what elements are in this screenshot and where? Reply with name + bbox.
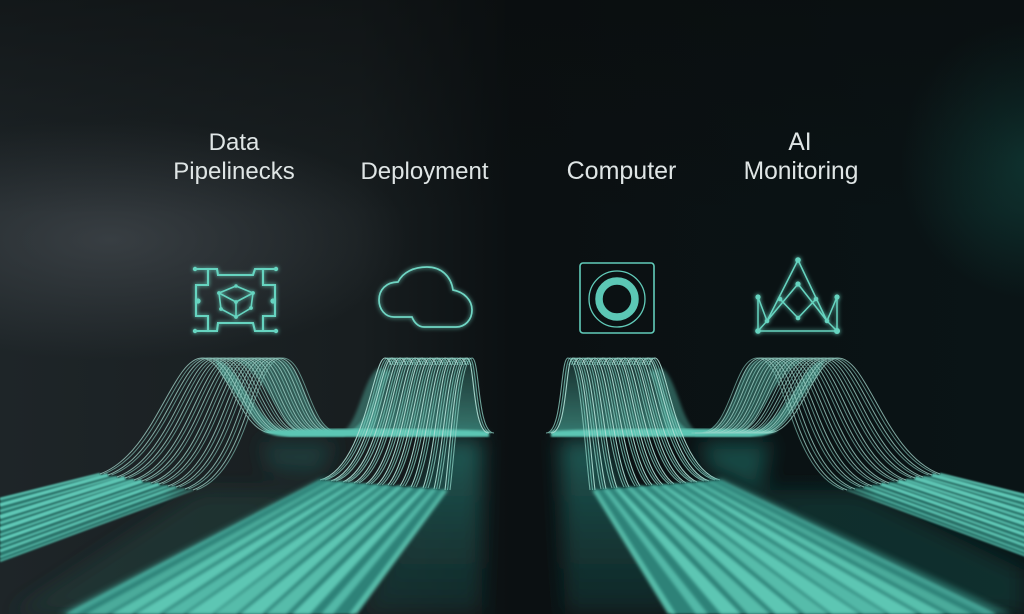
wave: deployment	[58, 358, 494, 614]
icon: ring in square	[580, 263, 654, 333]
wave: data pipelines	[0, 358, 348, 562]
ribbon strips: computer	[592, 478, 1012, 614]
ribbon strips: deployment	[58, 478, 448, 614]
icon: circuit cube	[193, 267, 278, 333]
floor reflections	[10, 440, 1024, 614]
label: AI Monitoring: AI	[788, 129, 812, 156]
icon: cloud	[379, 267, 472, 327]
label: Data Pipelinecks: Data	[209, 129, 260, 156]
label: AI Monitoring: Monitoring	[744, 158, 858, 185]
wave: AI monitoring	[692, 358, 1024, 562]
label: Deployment: Deployment	[360, 158, 489, 185]
label: Data Pipelinecks: Pipelinecks	[173, 158, 295, 185]
icon: crown network	[755, 257, 840, 334]
label: Computer: Computer	[567, 157, 676, 185]
wave: computer	[546, 358, 1012, 614]
